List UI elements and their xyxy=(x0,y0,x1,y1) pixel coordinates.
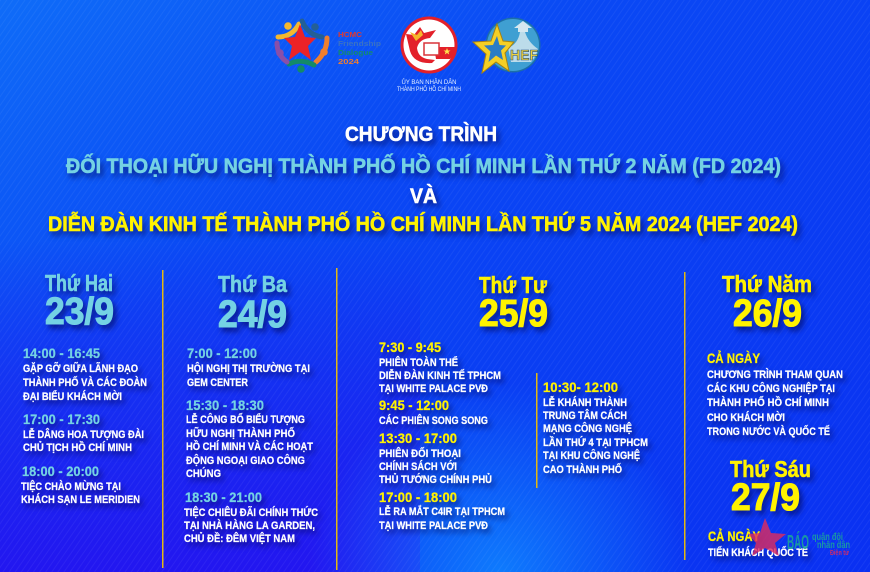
watermark wordmark: BÁO xyxy=(787,531,809,554)
watermark wordmark: Điện tử xyxy=(830,550,850,557)
schedule: Thursday items: CÁC KHU CÔNG NGHIỆP TẠI xyxy=(707,382,835,395)
schedule: Wednesday left column: PHIÊN TOÀN THỂ xyxy=(379,356,458,369)
schedule: Monday items: ĐẠI BIỂU KHÁCH MỜI xyxy=(23,390,122,403)
day heading: Thứ Năm 26/9: 26/9 xyxy=(733,293,802,335)
schedule: Monday items: TIỆC CHÀO MỪNG TẠI xyxy=(21,480,121,493)
schedule: Wednesday left column: TẠI WHITE PALACE PVĐ xyxy=(379,383,488,395)
schedule: Wednesday right column: TRUNG TÂM CÁCH xyxy=(543,409,627,422)
icon: red star xyxy=(284,24,316,60)
logo wordmark: HCMC xyxy=(338,30,363,39)
day heading: Thứ Ba 24/9 xyxy=(218,271,288,336)
schedule: Monday items: LỄ DÂNG HOA TƯỢNG ĐÀI xyxy=(23,428,144,441)
schedule: Tuesday items xyxy=(184,346,318,545)
schedule: Tuesday items: CHÚNG xyxy=(186,467,221,480)
schedule: Wednesday right column: LỄ KHÁNH THÀNH xyxy=(543,396,627,409)
day heading: Thứ Ba 24/9: Thứ Ba xyxy=(218,271,288,297)
panel: Tuesday 24/9 xyxy=(184,271,318,545)
schedule: Thursday items: TRONG NƯỚC VÀ QUỐC TẾ xyxy=(707,424,830,438)
schedule: Wednesday right column: CAO THÀNH PHỐ xyxy=(543,462,622,476)
day heading: Thứ Năm 26/9 xyxy=(722,271,812,335)
schedule: Tuesday items: TẠI NHÀ HÀNG LA GARDEN, xyxy=(184,519,315,532)
schedule: Friday items: CẢ NGÀY xyxy=(708,529,760,544)
watermark wordmark: nhân dân xyxy=(817,540,850,551)
logo: HEF: HEF xyxy=(510,47,538,64)
schedule: Thursday items xyxy=(707,351,843,438)
schedule: Wednesday left column: CHÍNH SÁCH VỚI xyxy=(379,460,457,473)
day heading: Thứ Tư 25/9 xyxy=(479,272,548,335)
schedule: Wednesday left column: THỦ TƯỚNG CHÍNH PHỦ xyxy=(379,473,492,486)
heading block xyxy=(48,121,798,236)
schedule: Tuesday items: HỒ CHÍ MINH VÀ CÁC HOẠT xyxy=(186,440,313,453)
schedule: Wednesday right column xyxy=(543,380,648,476)
schedule: Wednesday left column: 9:45 - 12:00 xyxy=(379,398,449,413)
logo wordmark: Friendship xyxy=(338,39,381,48)
logo: HEF xyxy=(473,18,540,73)
watermark: Báo Quân đội nhân dân xyxy=(748,518,850,557)
day heading: Thứ Tư 25/9: 25/9 xyxy=(479,293,548,335)
day heading: Thứ Tư 25/9: Thứ Tư xyxy=(479,272,548,298)
schedule: Wednesday left column: 7:30 - 9:45 xyxy=(379,340,441,355)
logo wordmark: 2024 xyxy=(338,57,360,66)
column dividers xyxy=(162,268,686,570)
schedule: Wednesday right column: 10:30- 12:00 xyxy=(543,380,618,395)
schedule: Wednesday left column: 17:00 - 18:00 xyxy=(379,490,457,505)
schedule: Friday items: TIẾN KHÁCH QUỐC TẾ xyxy=(708,545,808,559)
title: FD 2024: ĐỐI THOẠI HỮU NGHỊ THÀNH PHỐ HỒ CHÍ MINH LẦN THỨ 2 NĂM (FD 2024) xyxy=(66,152,781,178)
panel: Friday 27/9 xyxy=(708,456,811,559)
schedule: Thursday items: CHƯƠNG TRÌNH THAM QUAN xyxy=(707,368,843,381)
schedule: Wednesday left column: DIỄN ĐÀN KINH TẾ TPHCM xyxy=(379,369,501,382)
schedule: Monday items xyxy=(21,346,147,506)
logos row xyxy=(276,16,540,93)
logo wordmark: Dialogue xyxy=(338,48,373,57)
schedule: Tuesday items: CHỦ ĐỀ: ĐÊM VIỆT NAM xyxy=(184,532,295,545)
title: HEF 2024: DIỄN ĐÀN KINH TẾ THÀNH PHỐ HỒ CHÍ MINH LẦN THỨ 5 NĂM 2024 (HEF 2024) xyxy=(48,210,798,236)
icon: watermark star xyxy=(748,518,786,556)
day heading: Thứ Năm 26/9: Thứ Năm xyxy=(722,271,812,297)
day heading: Thứ Hai 23/9: Thứ Hai xyxy=(45,270,113,296)
schedule: Monday items: 17:00 - 17:30 xyxy=(23,412,100,427)
schedule: Wednesday left column: LỄ RA MẮT C4IR TẠI TPHCM xyxy=(379,505,505,518)
logo: Ủy ban nhân dân TP.HCM xyxy=(400,16,458,74)
schedule: Tuesday items: 18:30 - 21:00 xyxy=(185,490,262,505)
schedule: Tuesday items: ĐỘNG NGOẠI GIAO CÔNG xyxy=(186,454,305,467)
schedule: Tuesday items: 7:00 - 12:00 xyxy=(187,346,257,361)
schedule: Monday items: 18:00 - 20:00 xyxy=(22,464,99,479)
schedule: Tuesday items: GEM CENTER xyxy=(187,377,248,389)
schedule: Thursday items: THÀNH PHỐ HỒ CHÍ MINH xyxy=(707,395,829,409)
schedule: Monday items: 14:00 - 16:45 xyxy=(23,346,100,361)
schedule: Tuesday items: TIỆC CHIÊU ĐÃI CHÍNH THỨC xyxy=(184,506,318,519)
schedule: Tuesday items: HỘI NGHỊ THỊ TRƯỜNG TẠI xyxy=(187,362,310,375)
schedule: Thursday items: CHO KHÁCH MỜI xyxy=(707,411,785,424)
caption: Ủy ban nhân dân xyxy=(397,79,461,93)
panel: Wednesday 25/9 xyxy=(379,272,648,532)
caption: Ủy ban nhân dân: ỦY BAN NHÂN DÂN xyxy=(402,79,456,86)
schedule: Wednesday left column xyxy=(379,340,505,532)
title: và: VÀ xyxy=(410,183,437,208)
schedule: Monday items: KHÁCH SẠN LE MERIDIEN xyxy=(21,493,140,506)
schedule: Monday items: CHỦ TỊCH HỒ CHÍ MINH xyxy=(23,441,132,454)
schedule: Thursday items: CẢ NGÀY xyxy=(707,351,760,366)
day heading: Thứ Sáu 27/9: 27/9 xyxy=(731,477,800,519)
schedule: Wednesday left column: PHIÊN ĐỐI THOẠI xyxy=(379,446,461,460)
day heading: Thứ Sáu 27/9 xyxy=(730,456,811,519)
title: chương trình: CHƯƠNG TRÌNH xyxy=(345,121,497,146)
watermark wordmark xyxy=(787,531,850,557)
panel: Monday 23/9 xyxy=(21,270,147,506)
schedule: Tuesday items: LỄ CÔNG BỐ BIỂU TƯỢNG xyxy=(186,412,305,426)
schedule: Wednesday left column: 13:30 - 17:00 xyxy=(379,431,457,446)
schedule: Tuesday items: HỮU NGHỊ THÀNH PHỐ xyxy=(186,426,295,440)
schedule: Wednesday right column: TẠI KHU CÔNG NGHỆ xyxy=(543,449,640,462)
schedule: Wednesday left column: TẠI WHITE PALACE PVĐ xyxy=(379,520,488,532)
caption: Ủy ban nhân dân: THÀNH PHỐ HỒ CHÍ MINH xyxy=(397,86,461,93)
day heading: Thứ Ba 24/9: 24/9 xyxy=(218,294,287,336)
day heading: Thứ Sáu 27/9: Thứ Sáu xyxy=(730,456,811,482)
watermark wordmark: quân đội xyxy=(812,532,843,543)
schedule: Friday items xyxy=(708,529,808,559)
day heading: Thứ Hai 23/9 xyxy=(45,270,114,333)
logo: HCMC Friendship Dialogue 2024 xyxy=(276,21,381,73)
day heading: Thứ Hai 23/9: 23/9 xyxy=(45,291,114,333)
schedule: Wednesday right column: LẦN THỨ 4 TẠI TPHCM xyxy=(543,436,648,449)
schedule: Monday items: THÀNH PHỐ VÀ CÁC ĐOÀN xyxy=(23,375,147,389)
panel: Thursday 26/9 xyxy=(707,271,843,438)
logo wordmark xyxy=(338,30,381,66)
schedule: Monday items: GẶP GỠ GIỮA LÃNH ĐẠO xyxy=(23,362,138,375)
schedule: Tuesday items: 15:30 - 18:30 xyxy=(186,398,264,413)
schedule: Wednesday left column: CÁC PHIÊN SONG SONG xyxy=(379,414,488,427)
schedule: Wednesday right column: MẠNG CÔNG NGHỆ xyxy=(543,422,632,435)
